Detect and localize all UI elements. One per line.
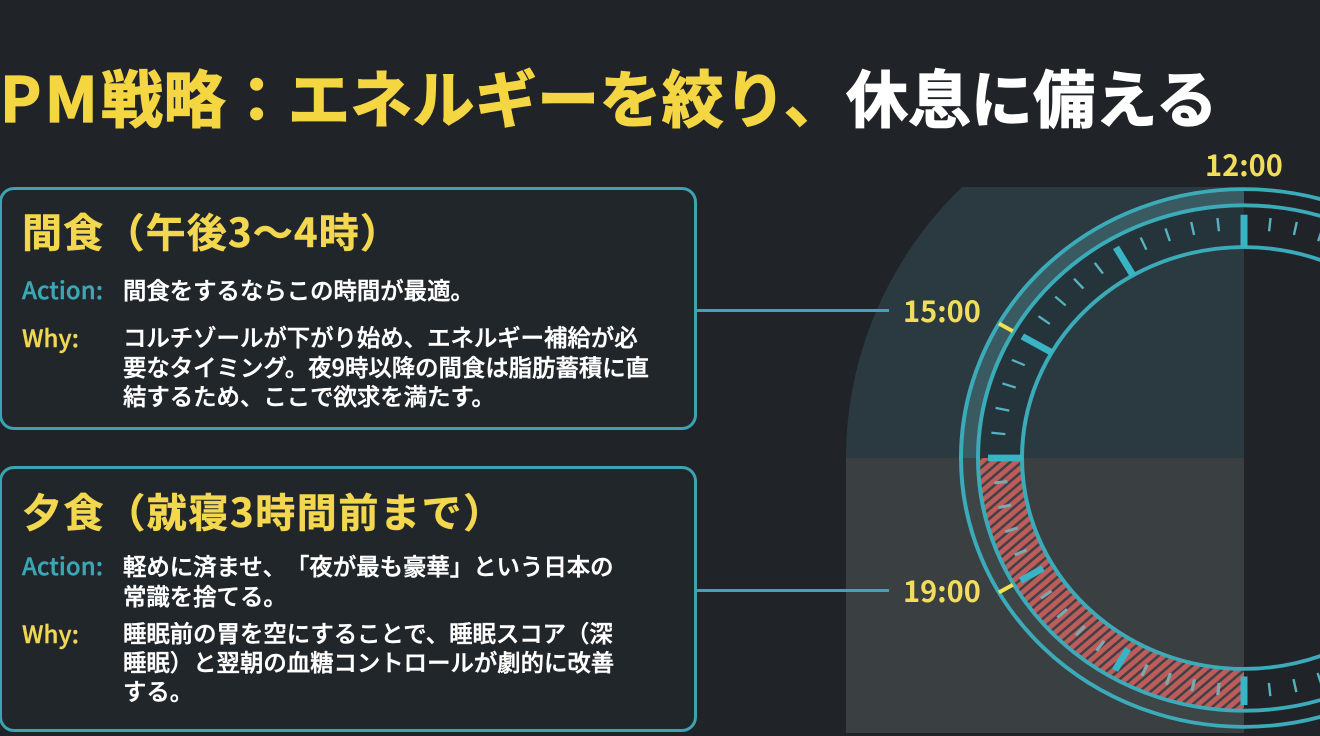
hatched red zone [978,458,1244,711]
snack why label: Why: [22,319,79,354]
snack action text: 間食をするならこの時間が最適。 [123,272,474,306]
grey evening quadrant [846,458,1244,733]
ring band: evening [961,458,1244,727]
major ticks [988,215,1244,705]
tick band: afternoon shading [978,205,1244,458]
dimmed ticks in hatched zone [994,482,1219,695]
yellow marker 19:00 [999,585,1013,592]
dinner why text: 睡眠）と翌朝の血糖コントロールが劇的に改善 [123,644,614,678]
snack why text: コルチゾールが下がり始め、エネルギー補給が必 [123,319,638,353]
snack why text: 要なタイミング。夜9時以降の間食は脂肪蓄積に直 [123,348,649,382]
dinner action text [123,548,614,612]
label 12:00: 12:00 [1205,143,1283,185]
dinner action text: 常識を捨てる。 [123,578,287,612]
dinner why text [123,615,614,707]
dinner action label: Action: [22,547,103,582]
label 15:00: 15:00 [903,289,981,331]
ring band: afternoon highlight [961,189,1244,458]
dinner why text: 睡眠前の胃を空にすることで、睡眠スコア（深 [123,615,613,649]
leader line 19:00 [696,589,889,592]
snack heading: 間食（午後3〜4時） [22,201,401,259]
yellow marker 15:00 [999,324,1013,331]
snack action label: Action: [22,271,103,306]
title: PM戦略：エネルギーを絞り、休息に備える [0,50,1218,140]
snack why text: 結するため、ここで欲求を満たす。 [123,378,495,412]
clock rings [961,189,1320,727]
teal afternoon quadrant [846,187,1244,458]
panel: snack [0,187,697,430]
dinner heading: 夕食（就寝3時間前まで） [22,481,505,539]
dinner why label: Why: [22,615,79,650]
minor ticks [991,218,1320,696]
snack why text [123,319,649,412]
dinner why text: する。 [123,673,193,707]
panel: dinner [0,466,697,732]
leader line 15:00 [696,309,889,312]
dinner action text: 軽めに済ませ、「夜が最も豪華」という日本の [123,548,614,582]
label 19:00: 19:00 [903,569,981,611]
